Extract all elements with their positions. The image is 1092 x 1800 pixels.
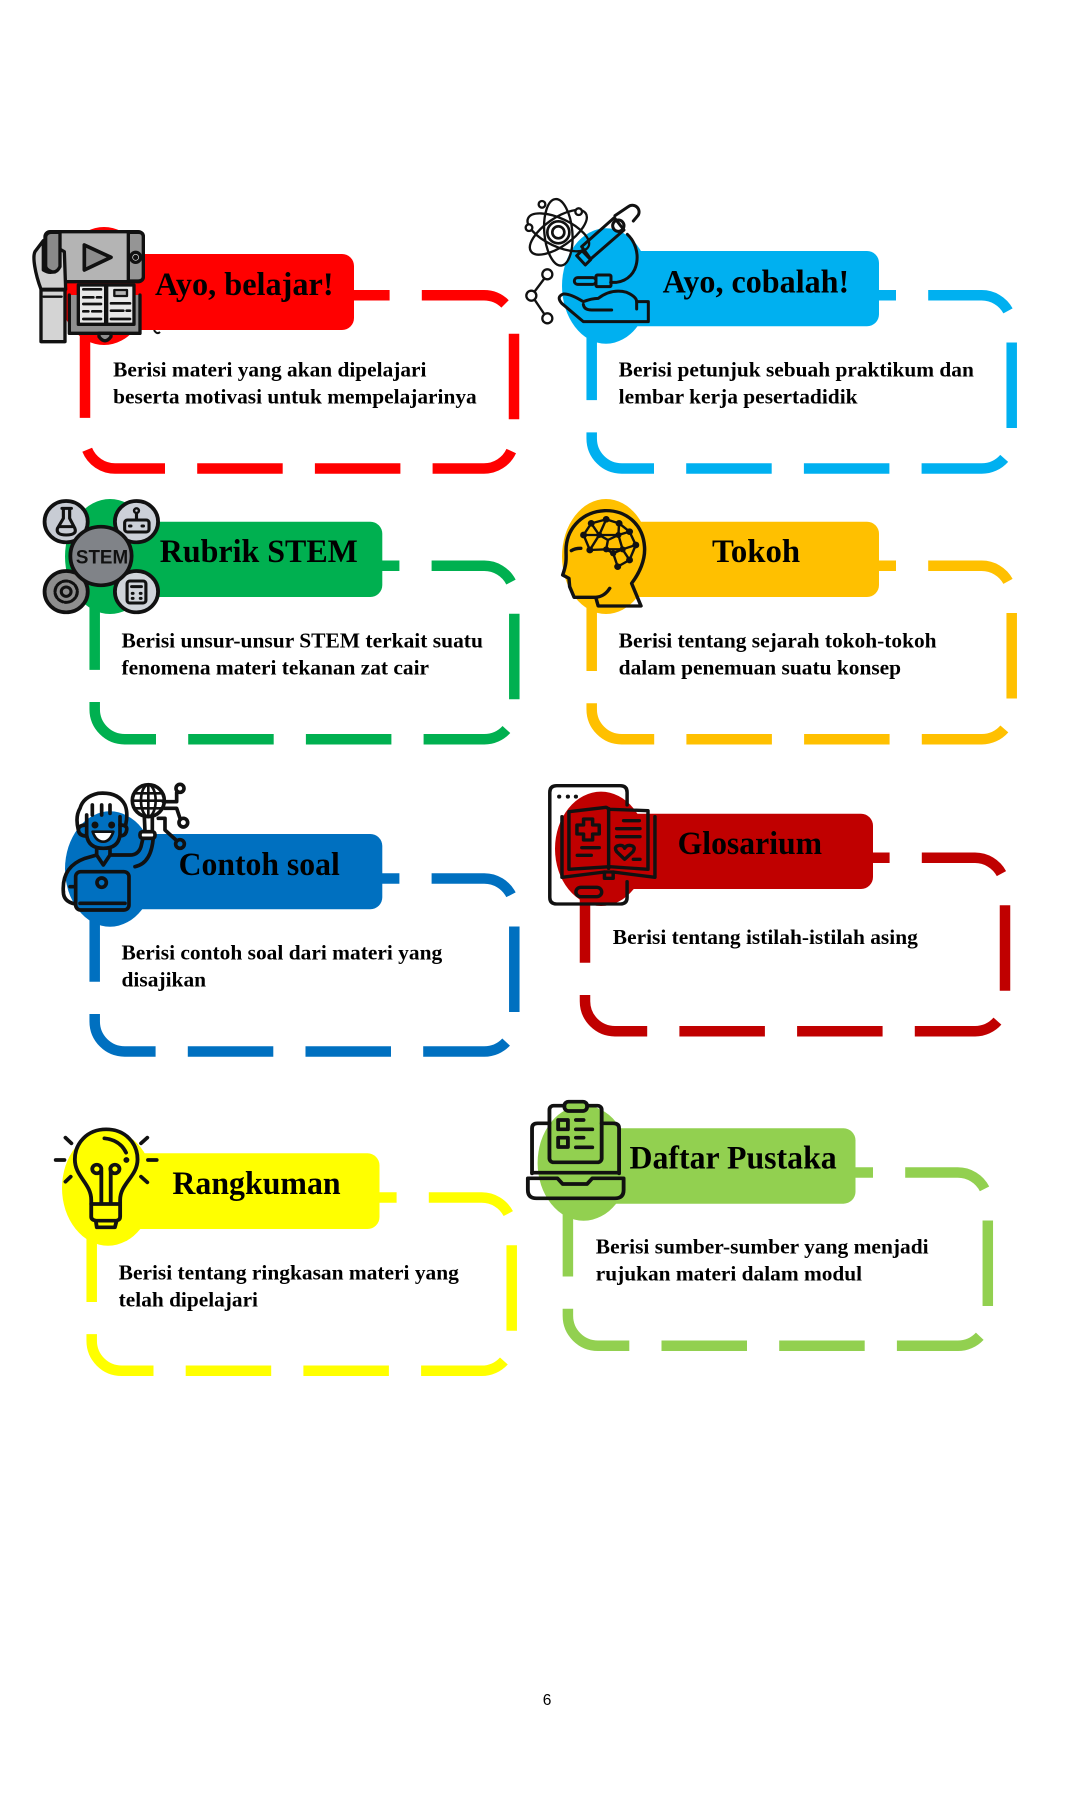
badge circle [562, 228, 650, 344]
dashed border [92, 1198, 512, 1371]
panel: Rubrik STEM [45, 499, 514, 739]
dashed border [585, 858, 1005, 1031]
panel: Ayo, belajar! [34, 227, 514, 468]
heading: Contoh soal [179, 847, 340, 883]
page number: 6 [543, 1692, 551, 1709]
header bar [110, 522, 382, 597]
dashed border [85, 295, 514, 468]
description: fenomena materi tekanan zat cair [122, 655, 429, 679]
icon: tablet with medical book [550, 786, 655, 904]
description: disajikan [122, 967, 206, 991]
header bar [584, 1128, 856, 1204]
connector stub [345, 290, 390, 301]
heading: Rangkuman [172, 1166, 341, 1202]
panel: Contoh soal [63, 784, 514, 1052]
panel: Rangkuman [56, 1129, 512, 1371]
header bar [108, 1153, 380, 1229]
icon: STEM cluster: STEM [76, 547, 128, 568]
connector stub [375, 561, 399, 571]
icon: student with laptop and globe [63, 784, 188, 910]
description: dalam penemuan suatu konsep [619, 655, 901, 679]
connector stub [370, 1192, 397, 1203]
description: Berisi petunjuk sebuah praktikum dan [619, 358, 974, 382]
badge circle [562, 499, 650, 614]
description: Berisi tentang istilah-istilah asing [613, 925, 918, 949]
panel: Tokoh [562, 499, 1012, 739]
heading: Tokoh [712, 534, 800, 570]
dashed border [95, 566, 514, 739]
icon: light bulb [56, 1129, 157, 1227]
description: beserta motivasi untuk mempelajarinya [113, 384, 477, 408]
description: Berisi tentang ringkasan materi yang [119, 1261, 459, 1285]
dashed border [592, 295, 1012, 468]
icon: atom, microscope and hand [522, 198, 648, 323]
description: lembar kerja pesertadidik [619, 384, 858, 408]
header bar [601, 814, 873, 889]
description: Berisi unsur-unsur STEM terkait suatu [122, 628, 483, 652]
description: Berisi materi yang akan dipelajari [113, 358, 427, 382]
connector stub [865, 853, 890, 863]
description: Berisi contoh soal dari materi yang [122, 941, 443, 965]
badge circle [62, 1130, 154, 1246]
connector stub [870, 290, 896, 301]
icon: STEM cluster [45, 501, 158, 612]
heading: Ayo, belajar! [155, 267, 334, 303]
description: telah dipelajari [119, 1288, 258, 1312]
heading: Daftar Pustaka [630, 1141, 837, 1177]
description: Berisi tentang sejarah tokoh-tokoh [619, 628, 937, 652]
icon: laptop with clipboard [528, 1102, 624, 1198]
dashed border [95, 878, 514, 1052]
icon: head with brain network [563, 511, 645, 606]
badge circle [65, 499, 155, 614]
description: Berisi sumber-sumber yang menjadi [596, 1234, 929, 1258]
connector stub [870, 561, 896, 571]
header bar [110, 834, 382, 909]
dashed border [592, 566, 1012, 739]
text fragment under header [154, 330, 160, 333]
header bar [104, 254, 354, 330]
description: rujukan materi dalam modul [596, 1261, 862, 1285]
heading: Ayo, cobalah! [663, 264, 849, 300]
heading: Rubrik STEM [160, 534, 358, 570]
badge circle [538, 1105, 630, 1221]
header bar [606, 251, 879, 326]
header bar [606, 522, 879, 597]
panel: Ayo, cobalah! [522, 198, 1012, 468]
badge circle [555, 792, 647, 906]
connector stub [375, 873, 399, 884]
badge circle [58, 227, 150, 345]
badge circle [65, 811, 155, 927]
heading: Glosarium [678, 826, 822, 862]
dashed border [568, 1172, 988, 1346]
panel: Glosarium [550, 786, 1005, 1031]
connector stub [845, 1167, 873, 1178]
panel: Daftar Pustaka [528, 1102, 988, 1346]
icon: tablet, hand and book [34, 232, 143, 342]
